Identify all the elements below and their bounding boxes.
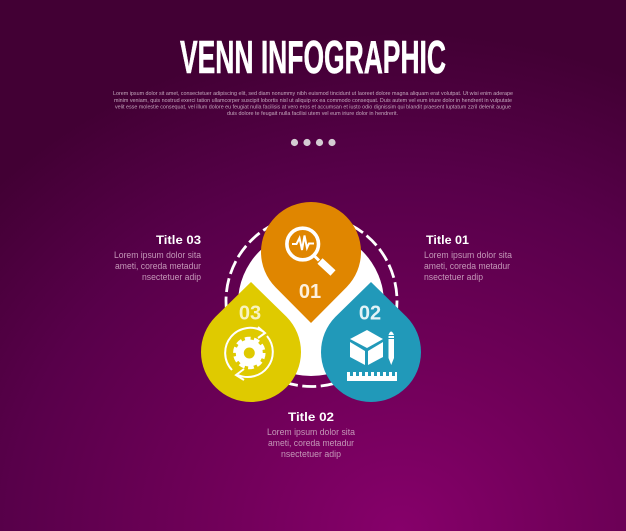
venn diagram <box>201 202 421 402</box>
intro text block: Lorem ipsum dolor sit amet, consectetuer adipiscing elit, sed diam nonummy nibh euismod tincidunt ut laoreet dolore magna aliquam erat volutpat. Ut wisi enim aderape <box>113 91 513 97</box>
label: title 02: ameti, coreda metadur <box>268 438 354 448</box>
dashed ring <box>226 216 397 386</box>
label: title 01: Lorem ipsum dolor sita <box>424 250 512 260</box>
label: title 03: nsectetuer adip <box>142 272 201 282</box>
drop 02: blue <box>321 282 421 402</box>
label: title 03 <box>114 233 201 282</box>
number 03: 03 <box>239 302 261 324</box>
number 02: 02 <box>359 302 381 324</box>
pagination dots <box>291 139 336 146</box>
label: title 02: Lorem ipsum dolor sita <box>267 427 355 437</box>
label: title 03: Title 03 <box>156 233 201 247</box>
label: title 01: Title 01 <box>426 233 469 247</box>
number 01: 01 <box>299 281 321 303</box>
drop 01: orange <box>261 202 361 323</box>
intro text block: minim veniam, quis nostrud exerci tation ullamcorper suscipit lobortis nisl ut aliquip ex ea commodo consequat. Duis autem vel eum iriure dolor in hendrerit in vulputate <box>114 98 512 104</box>
intro text block: velit esse molestie consequat, vel illum dolore eu feugiat nulla facilisis at vero eros et accumsan et iusto odio dignissim qui blandit praesent luptatum zzril delenit augue <box>115 104 511 110</box>
intro text block <box>113 91 513 117</box>
intro text block: duis dolore te feugait nulla facilisi utem vel eum iriure dolor in hendrerit. <box>227 111 398 117</box>
label: title 02: Title 02 <box>288 410 334 424</box>
label: title 02 <box>267 410 355 459</box>
label: title 01 <box>424 233 512 282</box>
label: title 02: nsectetuer adip <box>281 449 341 459</box>
icon: magnifier with pulse <box>287 228 333 273</box>
white centre circle <box>238 230 384 376</box>
icon: gear with circular arrows <box>225 327 273 380</box>
drop 03: yellow <box>201 282 301 402</box>
label: title 01: nsectetuer adip <box>424 272 483 282</box>
label: title 03: Lorem ipsum dolor sita <box>114 250 201 260</box>
label: title 03: ameti, coreda metadur <box>115 261 201 271</box>
label: title 01: ameti, coreda metadur <box>424 261 510 271</box>
icon: box, pencil and ruler <box>347 330 397 381</box>
